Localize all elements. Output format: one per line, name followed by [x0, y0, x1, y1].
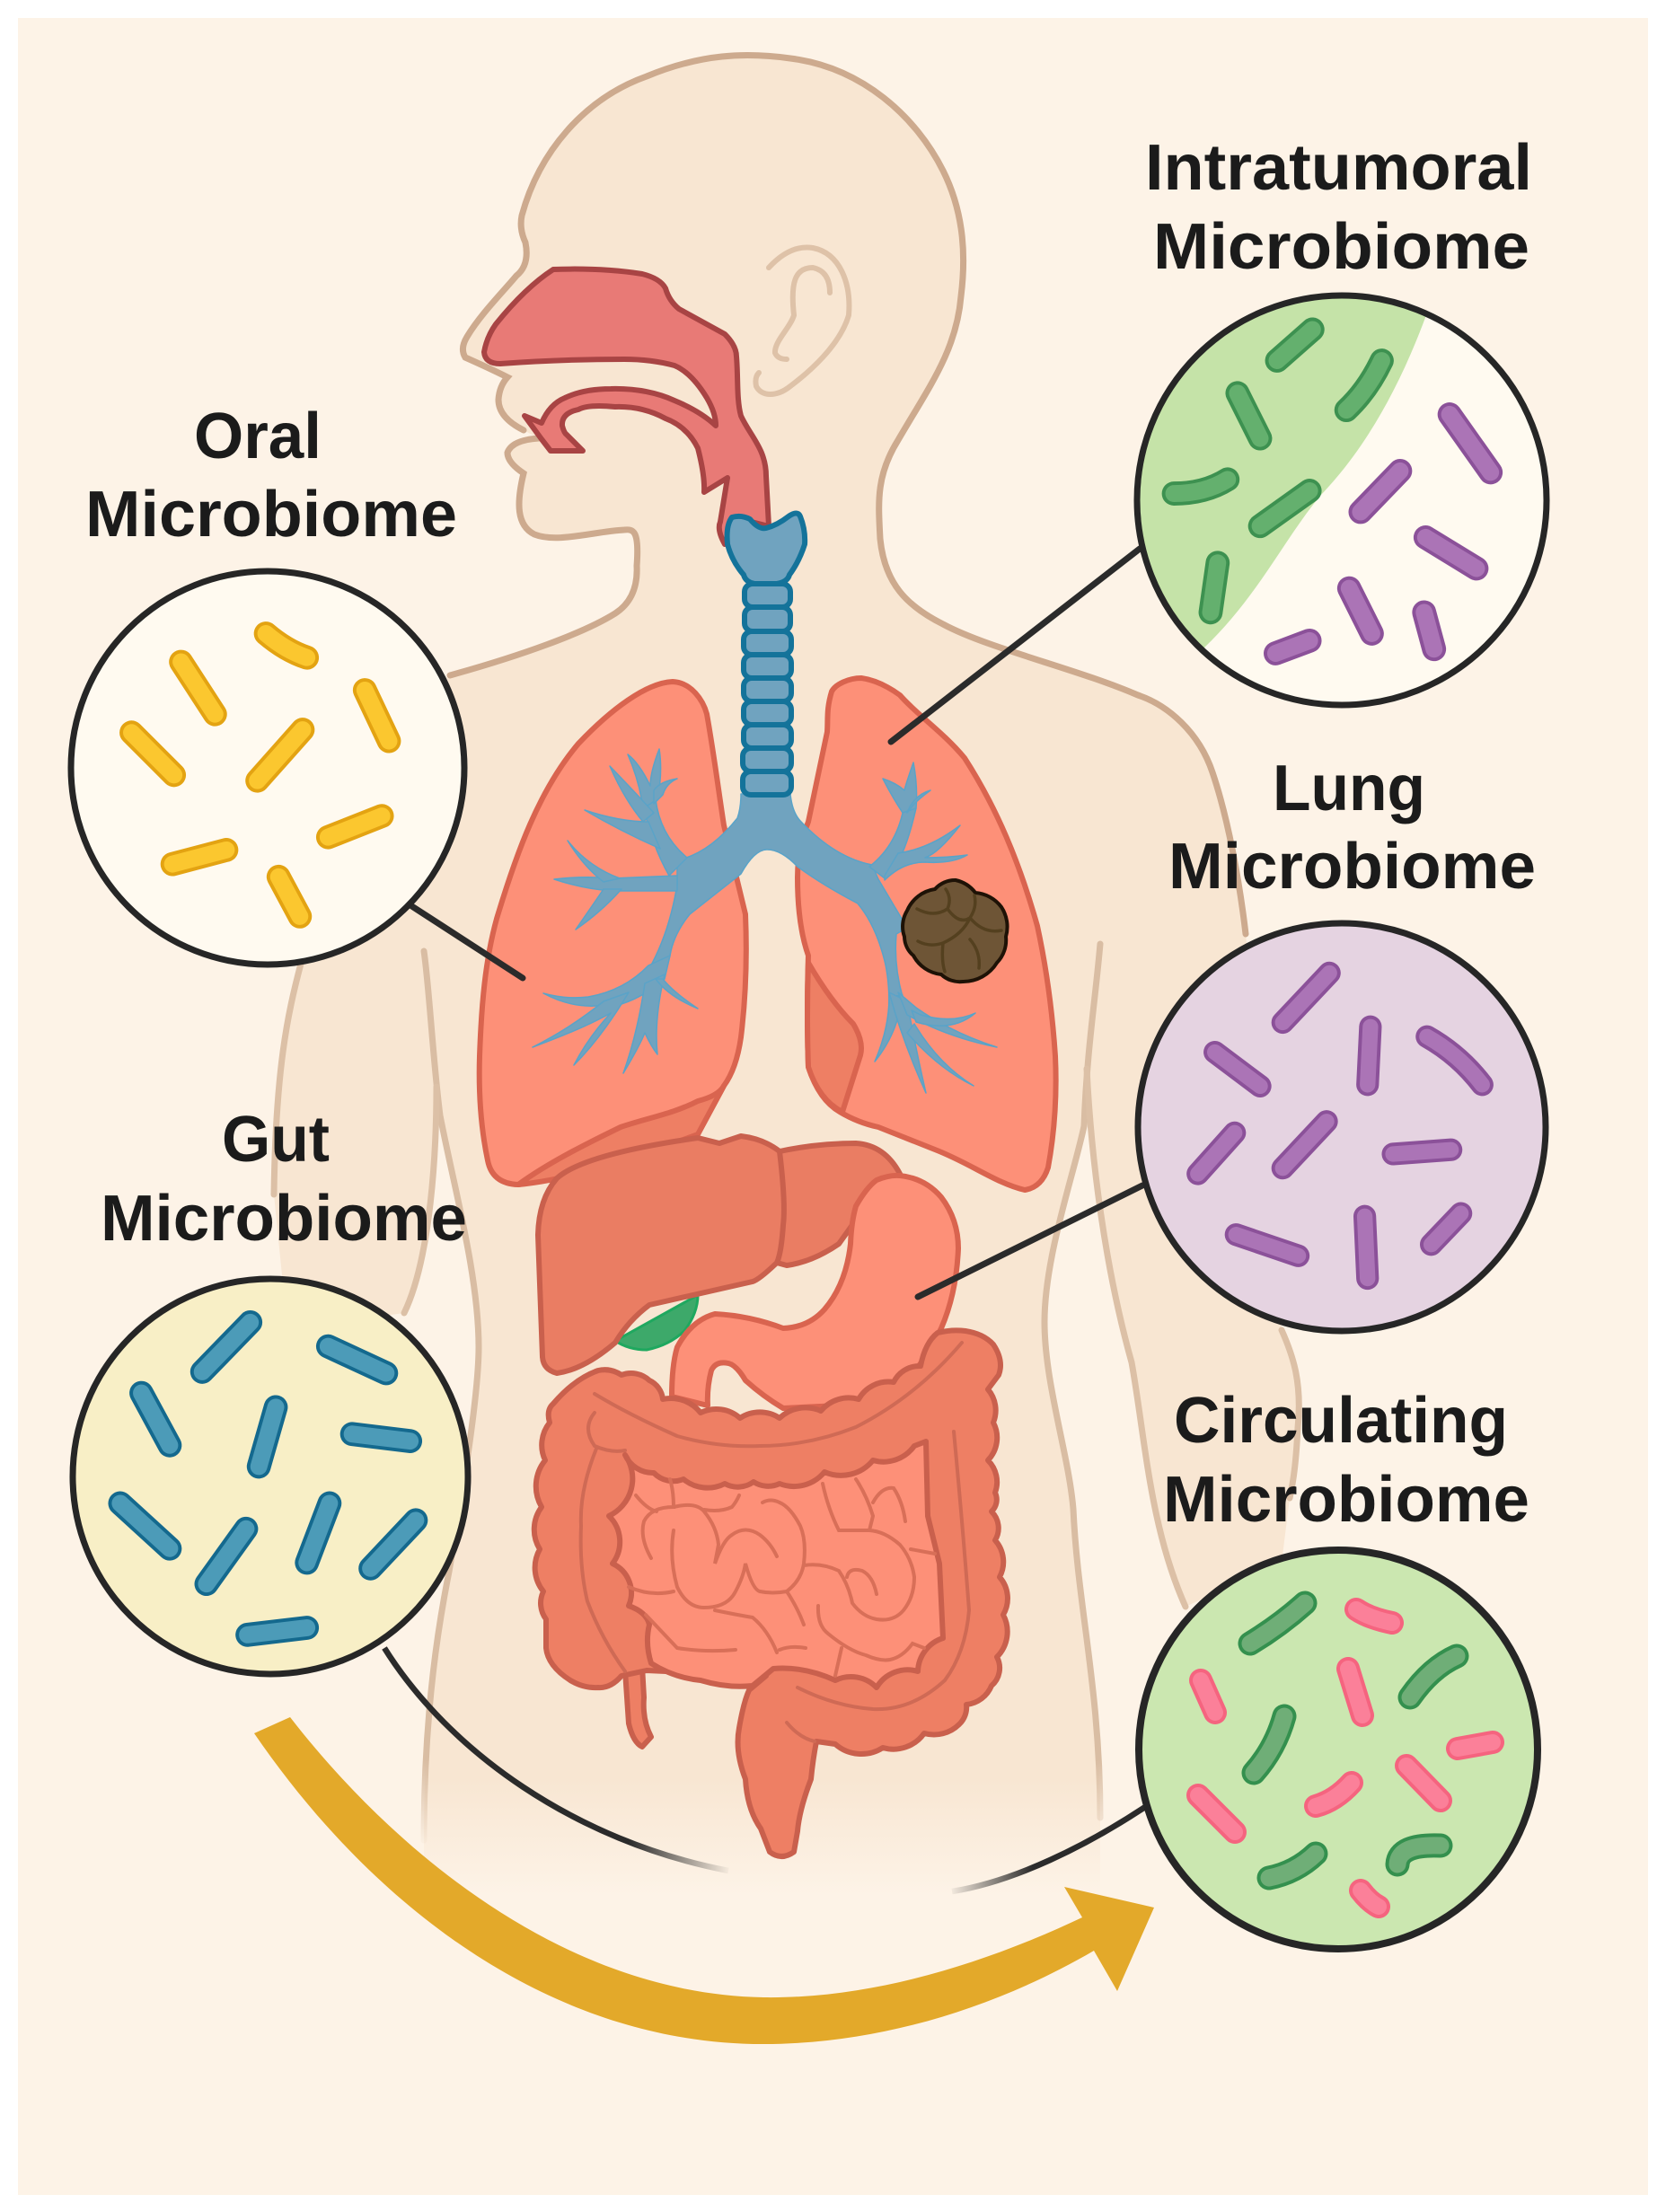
circulating magnified circle: [1139, 1550, 1538, 1949]
oral microbiome heading: Microbiome: [85, 479, 457, 551]
panel: lung microbiome: [1138, 753, 1546, 1331]
appendix: [625, 1666, 651, 1747]
curved line: circulating microbiome: [952, 1807, 1145, 1891]
curved flow arrow: [254, 1717, 1154, 2044]
right lung inner lobe: [807, 963, 861, 1112]
nasal cavity, mouth and throat: [484, 269, 769, 544]
lung heading: [1168, 753, 1536, 903]
main bronchi: [648, 794, 907, 1006]
intratumoral circle outline: [1137, 295, 1547, 705]
liver right lobe: [538, 1136, 784, 1373]
panel: oral microbiome: [71, 401, 464, 965]
colon inner contour lines: [581, 1343, 969, 1741]
pointer line: intratumoral microbiome to tumor lung: [891, 549, 1140, 742]
circulating heading: [1163, 1385, 1529, 1536]
gallbladder: [615, 1295, 698, 1350]
arm and torso contours: [274, 944, 1299, 1840]
lungs: [480, 678, 1056, 1190]
oral microbiome heading: [85, 401, 457, 551]
ear: [755, 247, 849, 394]
circulating heading: Microbiome: [1163, 1464, 1529, 1536]
gut heading: Microbiome: [101, 1183, 467, 1255]
bronchial tree: [533, 749, 997, 1093]
gut heading: [101, 1104, 467, 1255]
right-side lung: [798, 678, 1056, 1190]
oral bacteria: [131, 633, 389, 916]
left-side lung: [480, 682, 746, 1185]
panel: intratumoral microbiome: [1133, 142, 1550, 708]
trachea: [727, 514, 805, 795]
colon body and rectum: [534, 1330, 1008, 1856]
body fill: [274, 56, 1299, 1895]
circulating bacteria: [1198, 1603, 1493, 1907]
pointer line: oral microbiome to lung: [410, 905, 523, 978]
oral microbiome heading: Oral: [194, 401, 322, 472]
panel: circulating microbiome: [1139, 1385, 1538, 1949]
head and shoulder outline: [450, 56, 1246, 934]
human body silhouette: [274, 56, 1299, 1895]
pointer line: lung microbiome to stomach: [918, 1185, 1142, 1297]
circulating heading: Circulating: [1174, 1385, 1508, 1457]
tumor mass: [903, 880, 1008, 982]
liver: [538, 1136, 900, 1373]
large intestine: [534, 1330, 1008, 1856]
lung magnified circle: [1138, 923, 1546, 1331]
intratumoral heading: [1145, 132, 1532, 283]
stomach: [672, 1176, 958, 1408]
intratumoral heading: Intratumoral: [1145, 132, 1532, 204]
thyroid cartilage: [727, 514, 805, 584]
lung bacteria: [1198, 973, 1482, 1279]
lung heading: Lung: [1273, 753, 1425, 824]
panel: gut microbiome: [73, 1104, 468, 1674]
liver left lobe: [777, 1143, 900, 1265]
intratumoral bacteria: [1174, 330, 1491, 654]
small intestine folds: [629, 1479, 935, 1676]
intratumoral heading: Microbiome: [1153, 211, 1529, 283]
small intestine: [609, 1441, 943, 1688]
gut bacteria: [120, 1322, 416, 1635]
gut heading: Gut: [222, 1104, 330, 1176]
tumor-side green wedge: [1141, 298, 1426, 648]
left lung lower flap: [518, 1086, 724, 1185]
oral magnified circle: [71, 571, 464, 965]
curved line: gut microbiome: [384, 1648, 728, 1871]
intratumoral magnified circle: [1137, 295, 1547, 705]
gut magnified circle: [73, 1279, 468, 1674]
lung heading: Microbiome: [1168, 831, 1536, 903]
